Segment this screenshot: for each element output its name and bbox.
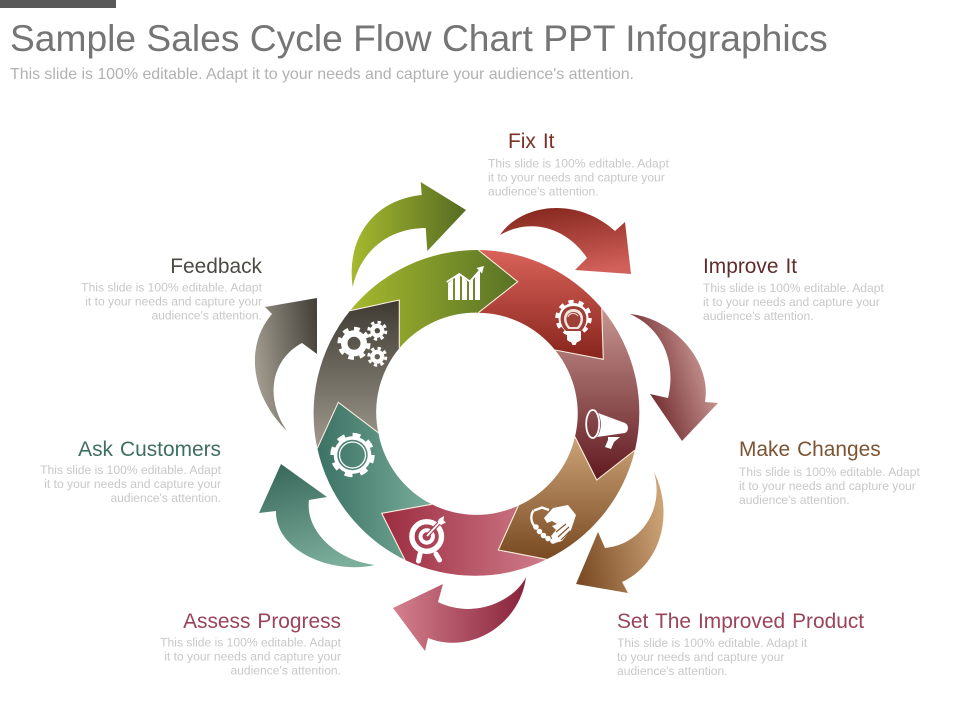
description: This slide is 100% editable. Adapt: [739, 465, 920, 479]
icon: light bulb in gear: [557, 302, 590, 345]
description: it to your needs and capture your: [85, 294, 262, 308]
heading: Assess Progress: [183, 610, 341, 633]
label: Improve It: [703, 255, 884, 323]
title: Sample Sales Cycle Flow Chart PPT Infographics: [10, 17, 828, 59]
top accent bar: [0, 0, 116, 8]
description: This slide is 100% editable. Adapt: [488, 156, 669, 170]
description: audience's attention.: [703, 309, 814, 323]
description: it to your needs and capture your: [488, 170, 665, 184]
description: audience's attention.: [110, 491, 221, 505]
description: This slide is 100% editable. Adapt: [81, 280, 263, 294]
subtitle: This slide is 100% editable. Adapt it to your needs and capture your audience's attention.: [10, 66, 634, 83]
arrow: teal: [259, 464, 375, 567]
ring segment: mauve: [555, 308, 639, 480]
icon: handshake: [531, 505, 576, 544]
ring segment: gray: [314, 300, 399, 448]
heading: Make Changes: [739, 438, 881, 461]
outer curved arrows: [255, 182, 718, 651]
description: it to your needs and capture your: [164, 650, 341, 664]
description: This slide is 100% editable. Adapt: [703, 281, 884, 295]
ring segment: teal: [317, 402, 432, 560]
icon: target with dart: [412, 516, 446, 561]
description: it to your needs and capture your: [44, 477, 221, 491]
arrow: pink: [393, 577, 526, 651]
label: Fix It: [488, 130, 669, 198]
ring segment: pink: [382, 504, 547, 576]
ring segment: brown: [498, 437, 635, 559]
description: it to your needs and capture your: [739, 479, 916, 493]
heading: Fix It: [508, 130, 555, 153]
heading: Ask Customers: [78, 438, 221, 461]
label: Assess Progress: [160, 610, 342, 678]
description: audience's attention.: [617, 664, 728, 678]
description: audience's attention.: [151, 308, 262, 322]
label: Ask Customers: [40, 438, 222, 505]
cycle ring: [314, 250, 639, 576]
arrow: red: [500, 208, 631, 274]
description: This slide is 100% editable. Adapt: [40, 463, 222, 477]
icon: three gears: [340, 322, 386, 365]
description: audience's attention.: [230, 664, 341, 678]
description: it to your needs and capture your: [703, 295, 880, 309]
description: audience's attention.: [488, 184, 599, 198]
segment edge highlights: [317, 250, 635, 560]
heading: Improve It: [703, 255, 797, 278]
ring segment: red: [478, 250, 603, 359]
description: audience's attention.: [739, 493, 850, 507]
ring segment: green: [350, 250, 518, 348]
icon: megaphone: [586, 410, 628, 449]
heading: Set The Improved Product: [617, 610, 864, 633]
label: Feedback: [81, 255, 263, 322]
arrow: mauve: [630, 314, 718, 441]
label: Make Changes: [739, 438, 920, 507]
description: to your needs and capture your: [617, 650, 784, 664]
label: Set The Improved Product: [617, 610, 864, 678]
heading: Feedback: [170, 255, 263, 278]
arrow: gray: [255, 298, 317, 431]
arrow: brown: [576, 472, 664, 593]
description: This slide is 100% editable. Adapt it: [617, 636, 808, 650]
description: This slide is 100% editable. Adapt: [160, 636, 342, 650]
icon: rising bar chart: [447, 266, 484, 300]
icon: gear: [332, 435, 372, 475]
arrow: green: [352, 182, 466, 287]
